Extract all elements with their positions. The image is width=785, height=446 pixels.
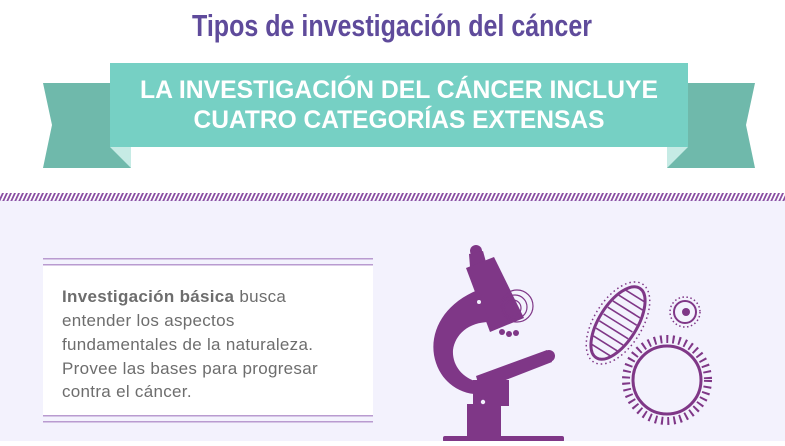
- text panel: basic research: Provee las bases para progresar: [62, 359, 318, 378]
- icon: small cell: [670, 297, 700, 327]
- title: Tipos de investigación del cáncer: [192, 8, 592, 43]
- icon: hatched cell: [573, 271, 663, 375]
- text panel: basic research: [43, 258, 373, 422]
- text panel: basic research: entender los aspectos: [62, 311, 235, 330]
- banner text: LA INVESTIGACIÓN DEL CÁNCER INCLUYE: [140, 74, 658, 104]
- banner: [43, 63, 755, 168]
- text panel: basic research: contra el cáncer.: [62, 382, 192, 401]
- lower background: [0, 200, 785, 441]
- icon: microscope: [433, 245, 564, 442]
- banner left tail: [43, 83, 131, 168]
- icon: spiky cell: [626, 339, 708, 421]
- banner right tail: [667, 83, 755, 168]
- hatched divider: [0, 193, 785, 201]
- banner: CUATRO CATEGORÍAS EXTENSAS: [194, 105, 604, 134]
- text panel: basic research: fundamentales de la naturaleza.: [62, 335, 313, 354]
- text panel: basic research: Investigación básica busca: [62, 287, 286, 306]
